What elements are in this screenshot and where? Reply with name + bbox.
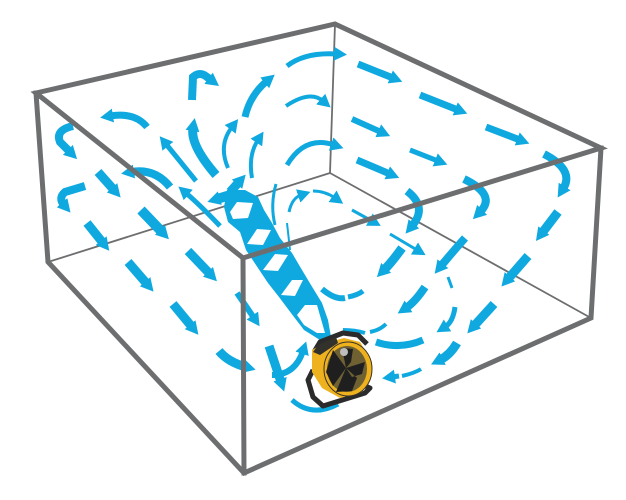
arrows: back and right of room: [273, 54, 566, 377]
room back edges: [48, 24, 591, 318]
fan grille: [327, 346, 367, 392]
fan rim: [324, 342, 372, 396]
icon: yellow floor fan: [308, 333, 372, 406]
fan hub label: [340, 348, 348, 356]
spiral jet of air from fan: [217, 182, 331, 340]
fan housing: [312, 338, 372, 398]
fan top panel: [313, 337, 338, 355]
fan blades: [326, 348, 365, 392]
arrows: left side of room: [59, 74, 338, 410]
fan stand: [308, 370, 370, 406]
fan carry handle: [314, 333, 367, 352]
